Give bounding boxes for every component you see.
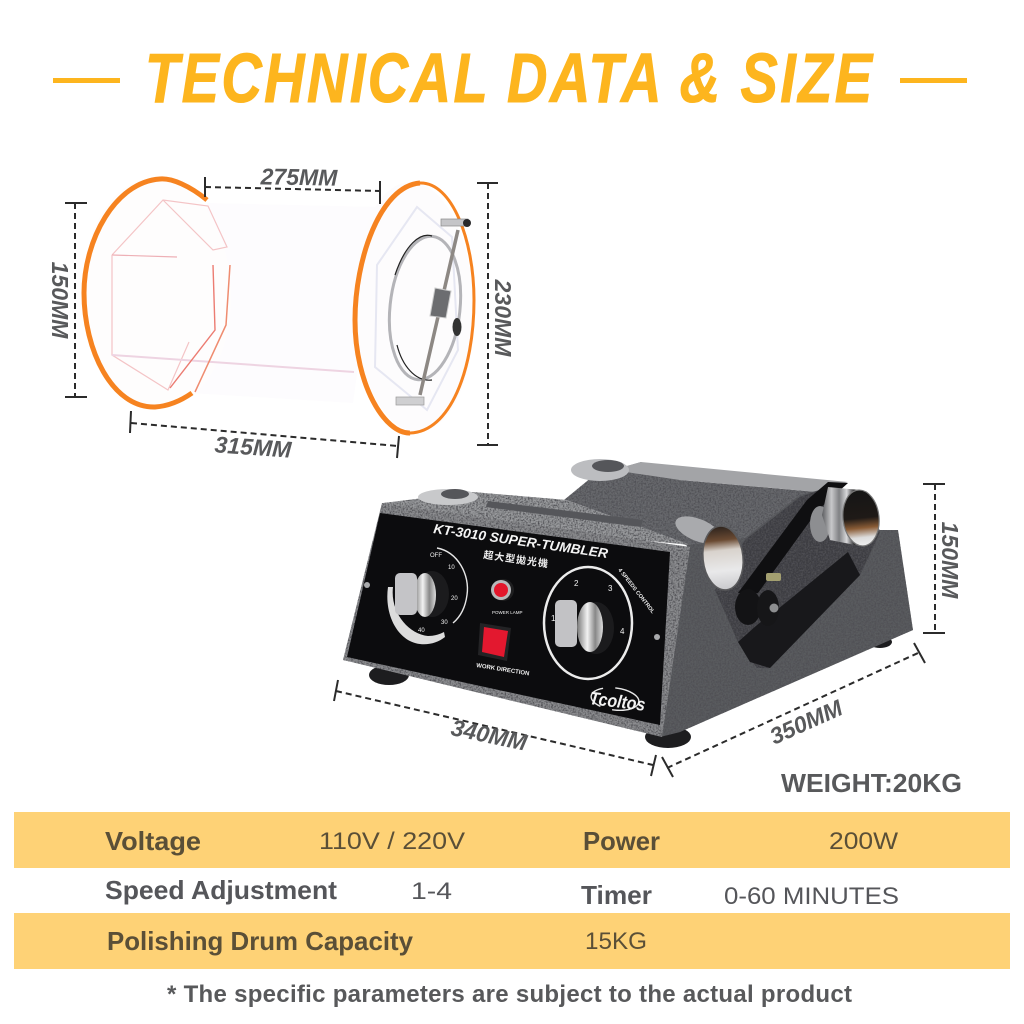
timer 30 label: 30 bbox=[441, 620, 448, 626]
rear right chrome disc bbox=[840, 488, 882, 548]
speed label: Speed Adjustment bbox=[105, 875, 337, 905]
work direction label: WORK DIRECTION bbox=[476, 663, 530, 677]
speed number 2: 2 bbox=[574, 579, 579, 588]
machine dimension: 150MM: 150MM bbox=[937, 522, 963, 599]
clamp knob bbox=[452, 318, 462, 336]
drum dimension: 275MM bbox=[205, 163, 380, 204]
footnote: * The specific parameters are subject to the actual product bbox=[167, 981, 852, 1008]
speed number 3: 3 bbox=[608, 584, 613, 593]
timer scale arc bbox=[437, 548, 467, 623]
title bbox=[53, 40, 967, 117]
machine dimension: 340MM bbox=[334, 680, 656, 776]
drum lid ring dark edge bbox=[395, 235, 432, 380]
brand name: Tcoltos bbox=[589, 688, 647, 715]
drum right hexagon bbox=[375, 207, 458, 410]
speed control label: 4 SPEEDS CONTROL bbox=[616, 568, 656, 616]
rod bottom bracket bbox=[396, 397, 424, 405]
speed knob bbox=[577, 602, 603, 652]
brand logo bbox=[589, 685, 647, 715]
power lamp label: POWER LAMP bbox=[492, 610, 523, 615]
title left rule bbox=[53, 78, 120, 83]
drum right orange ring bbox=[355, 183, 474, 433]
drum lid ring bbox=[383, 233, 467, 383]
panel screws bbox=[364, 582, 660, 640]
front right roller collar bbox=[672, 511, 724, 549]
drum inner hexagon left bbox=[112, 200, 354, 392]
speed knob shadow bbox=[578, 602, 614, 654]
rod top knob bbox=[463, 219, 471, 227]
weight label: WEIGHT:20KG bbox=[781, 768, 962, 798]
cradle dark band bbox=[715, 490, 880, 668]
rear right gear collar bbox=[810, 506, 830, 542]
front frame bbox=[343, 503, 690, 737]
brand swirl bbox=[590, 685, 640, 713]
timer 10 label: 10 bbox=[448, 565, 455, 571]
drum right orange ring thick edge bbox=[355, 183, 420, 433]
centre clamp bbox=[430, 288, 451, 318]
rear drum housing bbox=[564, 462, 817, 547]
black control panel bbox=[347, 513, 670, 725]
spec table bbox=[14, 812, 1010, 969]
machine feet bbox=[369, 636, 892, 748]
chinese subheading: 超大型拋光機 bbox=[483, 548, 550, 570]
drum dimension: 230MM: 230MM bbox=[490, 279, 516, 357]
power lamp bbox=[491, 579, 514, 601]
row 1 band bbox=[14, 812, 1010, 868]
timer value: 0-60 MINUTES bbox=[724, 883, 899, 910]
drum dimension: 150MM bbox=[47, 203, 87, 397]
voltage value: 110V / 220V bbox=[319, 828, 465, 855]
lid clamp rod bbox=[420, 230, 458, 395]
capacity label: Polishing Drum Capacity bbox=[107, 926, 414, 956]
timer dial bbox=[387, 548, 467, 644]
power label: Power bbox=[583, 826, 660, 856]
belt bbox=[738, 482, 848, 593]
drum dimension: 275MM: 275MM bbox=[259, 163, 338, 191]
timer white arc bbox=[387, 587, 445, 644]
rear right roller collar bbox=[822, 487, 860, 546]
front top plate bbox=[380, 492, 691, 545]
drum left end disc bbox=[79, 175, 235, 411]
speed value: 1-4 bbox=[411, 878, 452, 905]
speed ring bbox=[544, 567, 632, 679]
timer knob grip bbox=[395, 573, 417, 615]
timer knob bbox=[414, 573, 436, 617]
speed dial bbox=[544, 567, 632, 679]
tumbler machine bbox=[343, 459, 913, 748]
rear housing light top strip bbox=[612, 462, 848, 492]
machine dimension: 350MM bbox=[662, 643, 925, 777]
small screw bbox=[766, 573, 781, 581]
model heading: KT-3010 SUPER-TUMBLER bbox=[433, 521, 609, 561]
speed knob grip bbox=[555, 600, 577, 647]
rear left roller cap bbox=[571, 459, 629, 481]
embossed top lettering bbox=[486, 501, 643, 527]
speed number 1: 1 bbox=[551, 614, 556, 623]
drum dimension: 150MM: 150MM bbox=[47, 262, 73, 339]
side panel bbox=[660, 490, 913, 737]
machine dimension: 150MM bbox=[923, 484, 963, 633]
timer off label: OFF bbox=[430, 553, 442, 559]
capacity value: 15KG bbox=[585, 928, 647, 955]
drum illustration bbox=[79, 175, 478, 434]
row 3 band bbox=[14, 913, 1010, 969]
rocker switch bbox=[478, 623, 511, 661]
front left roller cap bbox=[418, 489, 478, 505]
pulley hub bbox=[770, 604, 778, 612]
speed number 4: 4 bbox=[620, 627, 625, 636]
drum left orange ring bbox=[84, 179, 207, 407]
timer 40 label: 40 bbox=[418, 628, 425, 634]
pulley bbox=[757, 590, 779, 626]
drum dimension: 315MM bbox=[130, 411, 399, 463]
drum body bbox=[190, 203, 380, 403]
cradle recess bbox=[738, 552, 860, 668]
front right chrome disc bbox=[700, 524, 746, 592]
drum dimension: 230MM bbox=[477, 183, 516, 445]
machine dimension: 350MM: 350MM bbox=[766, 694, 847, 749]
power value: 200W bbox=[829, 828, 898, 855]
drum right end disc bbox=[350, 180, 478, 434]
timer 20 label: 20 bbox=[451, 596, 458, 602]
belt loop bbox=[735, 589, 761, 625]
voltage label: Voltage bbox=[105, 826, 201, 856]
drum dimension: 315MM: 315MM bbox=[214, 431, 293, 463]
machine dimension: 340MM: 340MM bbox=[449, 714, 530, 756]
title right rule bbox=[900, 78, 967, 83]
title text: TECHNICAL DATA & SIZE bbox=[145, 40, 875, 117]
timer knob shadow bbox=[415, 571, 449, 617]
timer label: Timer bbox=[581, 880, 652, 910]
rod top bracket bbox=[441, 219, 468, 226]
